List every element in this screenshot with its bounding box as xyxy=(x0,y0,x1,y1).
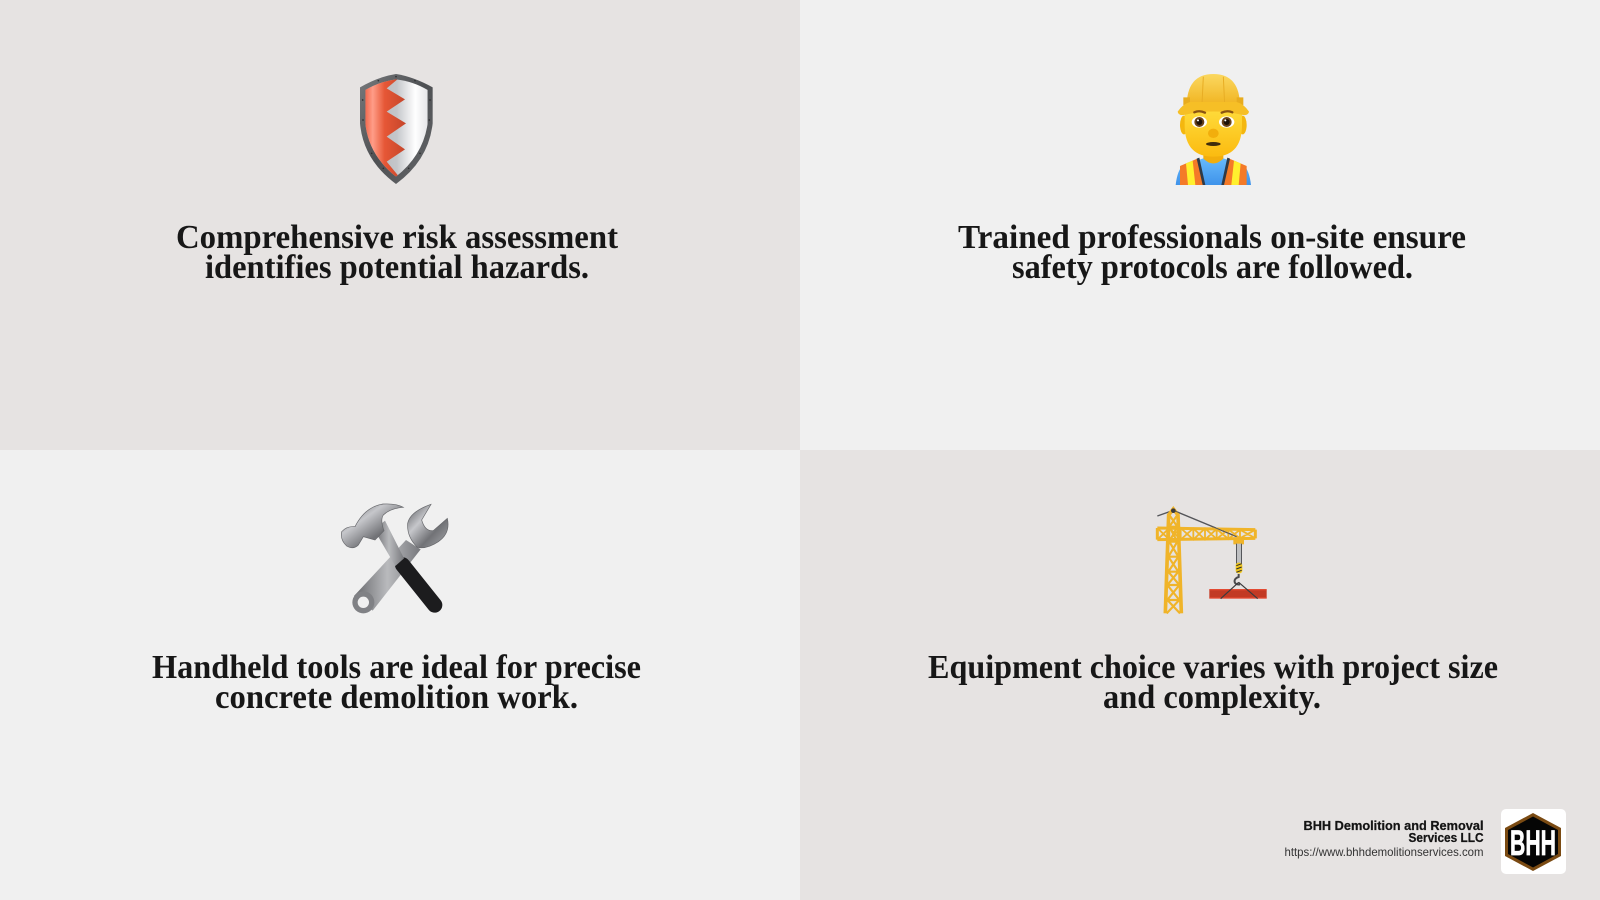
panel: risk assessment xyxy=(0,0,800,450)
panel: equipment choice xyxy=(800,450,1600,900)
heading: equipment choice: Equipment choice varies with project size xyxy=(928,649,1498,686)
company name and website: BHH Demolition and Removal xyxy=(1304,818,1484,833)
logo: BHH hexagon xyxy=(1501,809,1566,874)
panel background: handheld tools xyxy=(0,450,800,900)
icon: shield xyxy=(360,74,433,184)
heading: trained professionals: Trained professionals on-site ensure xyxy=(958,219,1466,256)
heading: trained professionals xyxy=(958,219,1466,286)
panel background: equipment choice xyxy=(800,450,1600,900)
icon: hammer and wrench xyxy=(341,504,448,613)
company name and website: Services LLC xyxy=(1408,830,1484,845)
company name and website: https://www.bhhdemolitionservices.com xyxy=(1284,845,1484,859)
panel: handheld tools xyxy=(0,450,800,900)
heading: handheld tools: concrete demolition work. xyxy=(215,679,578,716)
panel background: risk assessment xyxy=(0,0,800,450)
logo: BHH hexagon: BHH xyxy=(1510,824,1556,863)
heading: trained professionals: safety protocols are followed. xyxy=(1012,249,1413,286)
heading: risk assessment xyxy=(176,219,619,286)
heading: equipment choice: and complexity. xyxy=(1103,679,1321,716)
panel: trained professionals xyxy=(800,0,1600,450)
heading: handheld tools: Handheld tools are ideal for precise xyxy=(152,649,641,686)
company name and website xyxy=(1284,818,1484,859)
heading: equipment choice xyxy=(928,649,1498,716)
icon: construction worker xyxy=(1176,74,1251,185)
panel background: trained professionals xyxy=(800,0,1600,450)
heading: handheld tools xyxy=(152,649,641,716)
heading: risk assessment: Comprehensive risk assessment xyxy=(176,219,619,256)
icon: tower crane xyxy=(1157,508,1267,613)
heading: risk assessment: identifies potential hazards. xyxy=(205,249,589,286)
